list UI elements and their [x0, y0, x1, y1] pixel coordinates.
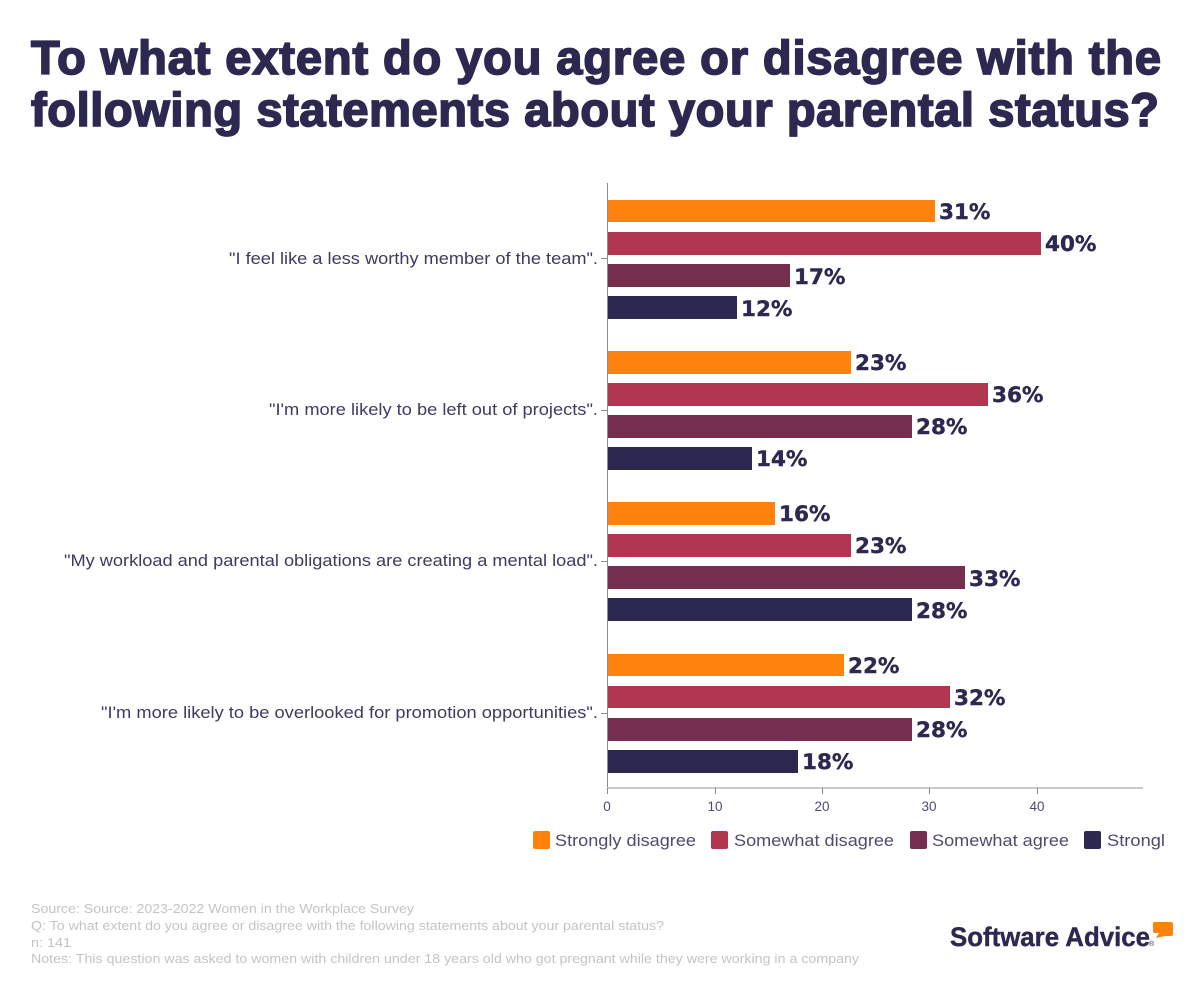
- group: overlooked for promotion: [101, 654, 1005, 775]
- group: mental load: [64, 502, 1020, 624]
- group: mental load: 28%: [916, 599, 967, 624]
- group: mental load: 23%: [855, 534, 906, 559]
- axis labels: 40: [1029, 799, 1045, 814]
- axis labels: [603, 799, 1045, 814]
- group: less worthy member: 31%: [939, 200, 990, 225]
- group: overlooked for promotion: 18%: [802, 750, 853, 775]
- axis labels: 30: [921, 799, 937, 814]
- source notes: [31, 901, 860, 966]
- title: To what extent do you agree or disagree with the: [31, 31, 1161, 84]
- legend: Strongl: [1107, 831, 1165, 850]
- legend: Somewhat disagree: [734, 831, 894, 850]
- logo: Software Advice: ®: [1149, 940, 1155, 948]
- group: less worthy member: 40%: [1045, 232, 1096, 257]
- source notes: Source: Source: 2023-2022 Women in the Workplace Survey: [31, 901, 415, 916]
- axis labels: 10: [707, 799, 723, 814]
- group: less worthy member: "I feel like a less worthy member of the team".: [229, 249, 598, 268]
- axis labels: 0: [603, 799, 611, 814]
- title: [31, 31, 1161, 136]
- group: less worthy member: [229, 200, 1096, 322]
- group: less worthy member: 17%: [794, 265, 845, 290]
- group: mental load: 16%: [779, 502, 830, 527]
- legend: Strongly disagree: [555, 831, 696, 850]
- source notes: n: 141: [31, 935, 71, 950]
- group: mental load: 33%: [969, 567, 1020, 592]
- group: left out of projects: [269, 351, 1043, 472]
- source notes: Q: To what extent do you agree or disagree with the following statements about your parental status?: [31, 918, 664, 933]
- group: left out of projects: 28%: [916, 415, 967, 440]
- group: mental load: "My workload and parental obligations are creating a mental load".: [64, 551, 598, 570]
- logo: Software Advice: Software Advice: [950, 922, 1150, 952]
- source notes: Notes: This question was asked to women with children under 18 years old who got pregnant while they were working in a company: [31, 951, 860, 966]
- group: less worthy member: 12%: [741, 297, 792, 322]
- group: left out of projects: "I'm more likely to be left out of projects".: [269, 400, 598, 419]
- group: overlooked for promotion: "I'm more likely to be overlooked for promotion opportunities".: [101, 703, 598, 722]
- axes: [601, 183, 1143, 794]
- axis labels: 20: [814, 799, 830, 814]
- group: overlooked for promotion: 22%: [848, 654, 899, 679]
- title: following statements about your parental status?: [31, 83, 1159, 136]
- group: overlooked for promotion: 32%: [954, 686, 1005, 711]
- legend: [533, 831, 1165, 850]
- legend: Somewhat agree: [932, 831, 1069, 850]
- group: overlooked for promotion: 28%: [916, 718, 967, 743]
- group: left out of projects: 23%: [855, 351, 906, 376]
- group: left out of projects: 14%: [756, 447, 807, 472]
- group: left out of projects: 36%: [992, 383, 1043, 408]
